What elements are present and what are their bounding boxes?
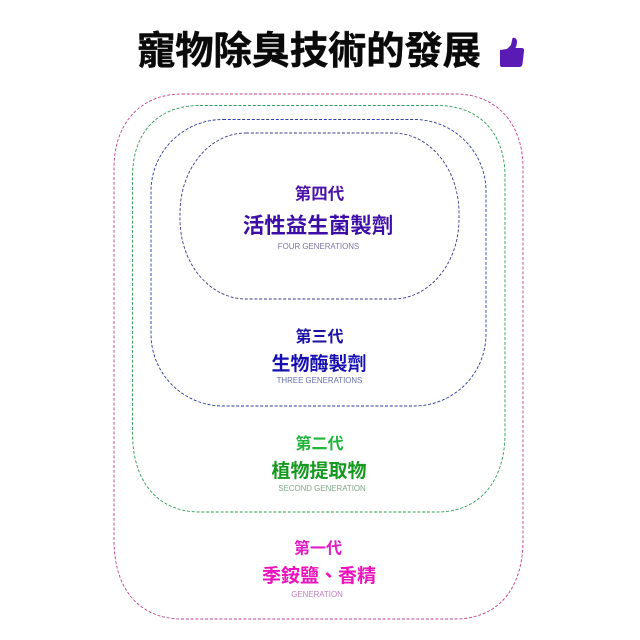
caption: four generations: FOUR GENERATIONS bbox=[278, 242, 359, 251]
heading: fourth generation: 第四代 bbox=[295, 184, 345, 204]
text block: fourth generation bbox=[243, 184, 393, 251]
caption: generation: GENERATION bbox=[291, 590, 343, 599]
icon: thumbs up bbox=[500, 38, 524, 67]
text block: third generation bbox=[271, 327, 367, 385]
name: biological enzyme preparation: 生物酶製劑 bbox=[271, 352, 367, 375]
panel: second generation outline bbox=[132, 106, 505, 512]
heading: second generation: 第二代 bbox=[295, 434, 344, 453]
caption: three generations: THREE GENERATIONS bbox=[277, 376, 362, 385]
panel: third generation outline bbox=[151, 120, 486, 406]
title: 寵物除臭技術的發展 bbox=[137, 30, 481, 73]
heading: third generation: 第三代 bbox=[295, 327, 344, 346]
heading: first generation: 第一代 bbox=[294, 538, 342, 558]
name: live probiotic preparation: 活性益生菌製劑 bbox=[243, 213, 393, 238]
name: plant extract: 植物提取物 bbox=[271, 460, 367, 482]
text block: first generation bbox=[262, 538, 376, 599]
caption: second generation: SECOND GENERATION bbox=[278, 484, 366, 493]
panel: first generation outline bbox=[114, 94, 523, 619]
name: quaternary ammonium salts and fragrance: 季銨鹽、香精 bbox=[262, 565, 376, 587]
text block: second generation bbox=[271, 434, 367, 493]
panel: fourth generation outline bbox=[180, 133, 459, 299]
